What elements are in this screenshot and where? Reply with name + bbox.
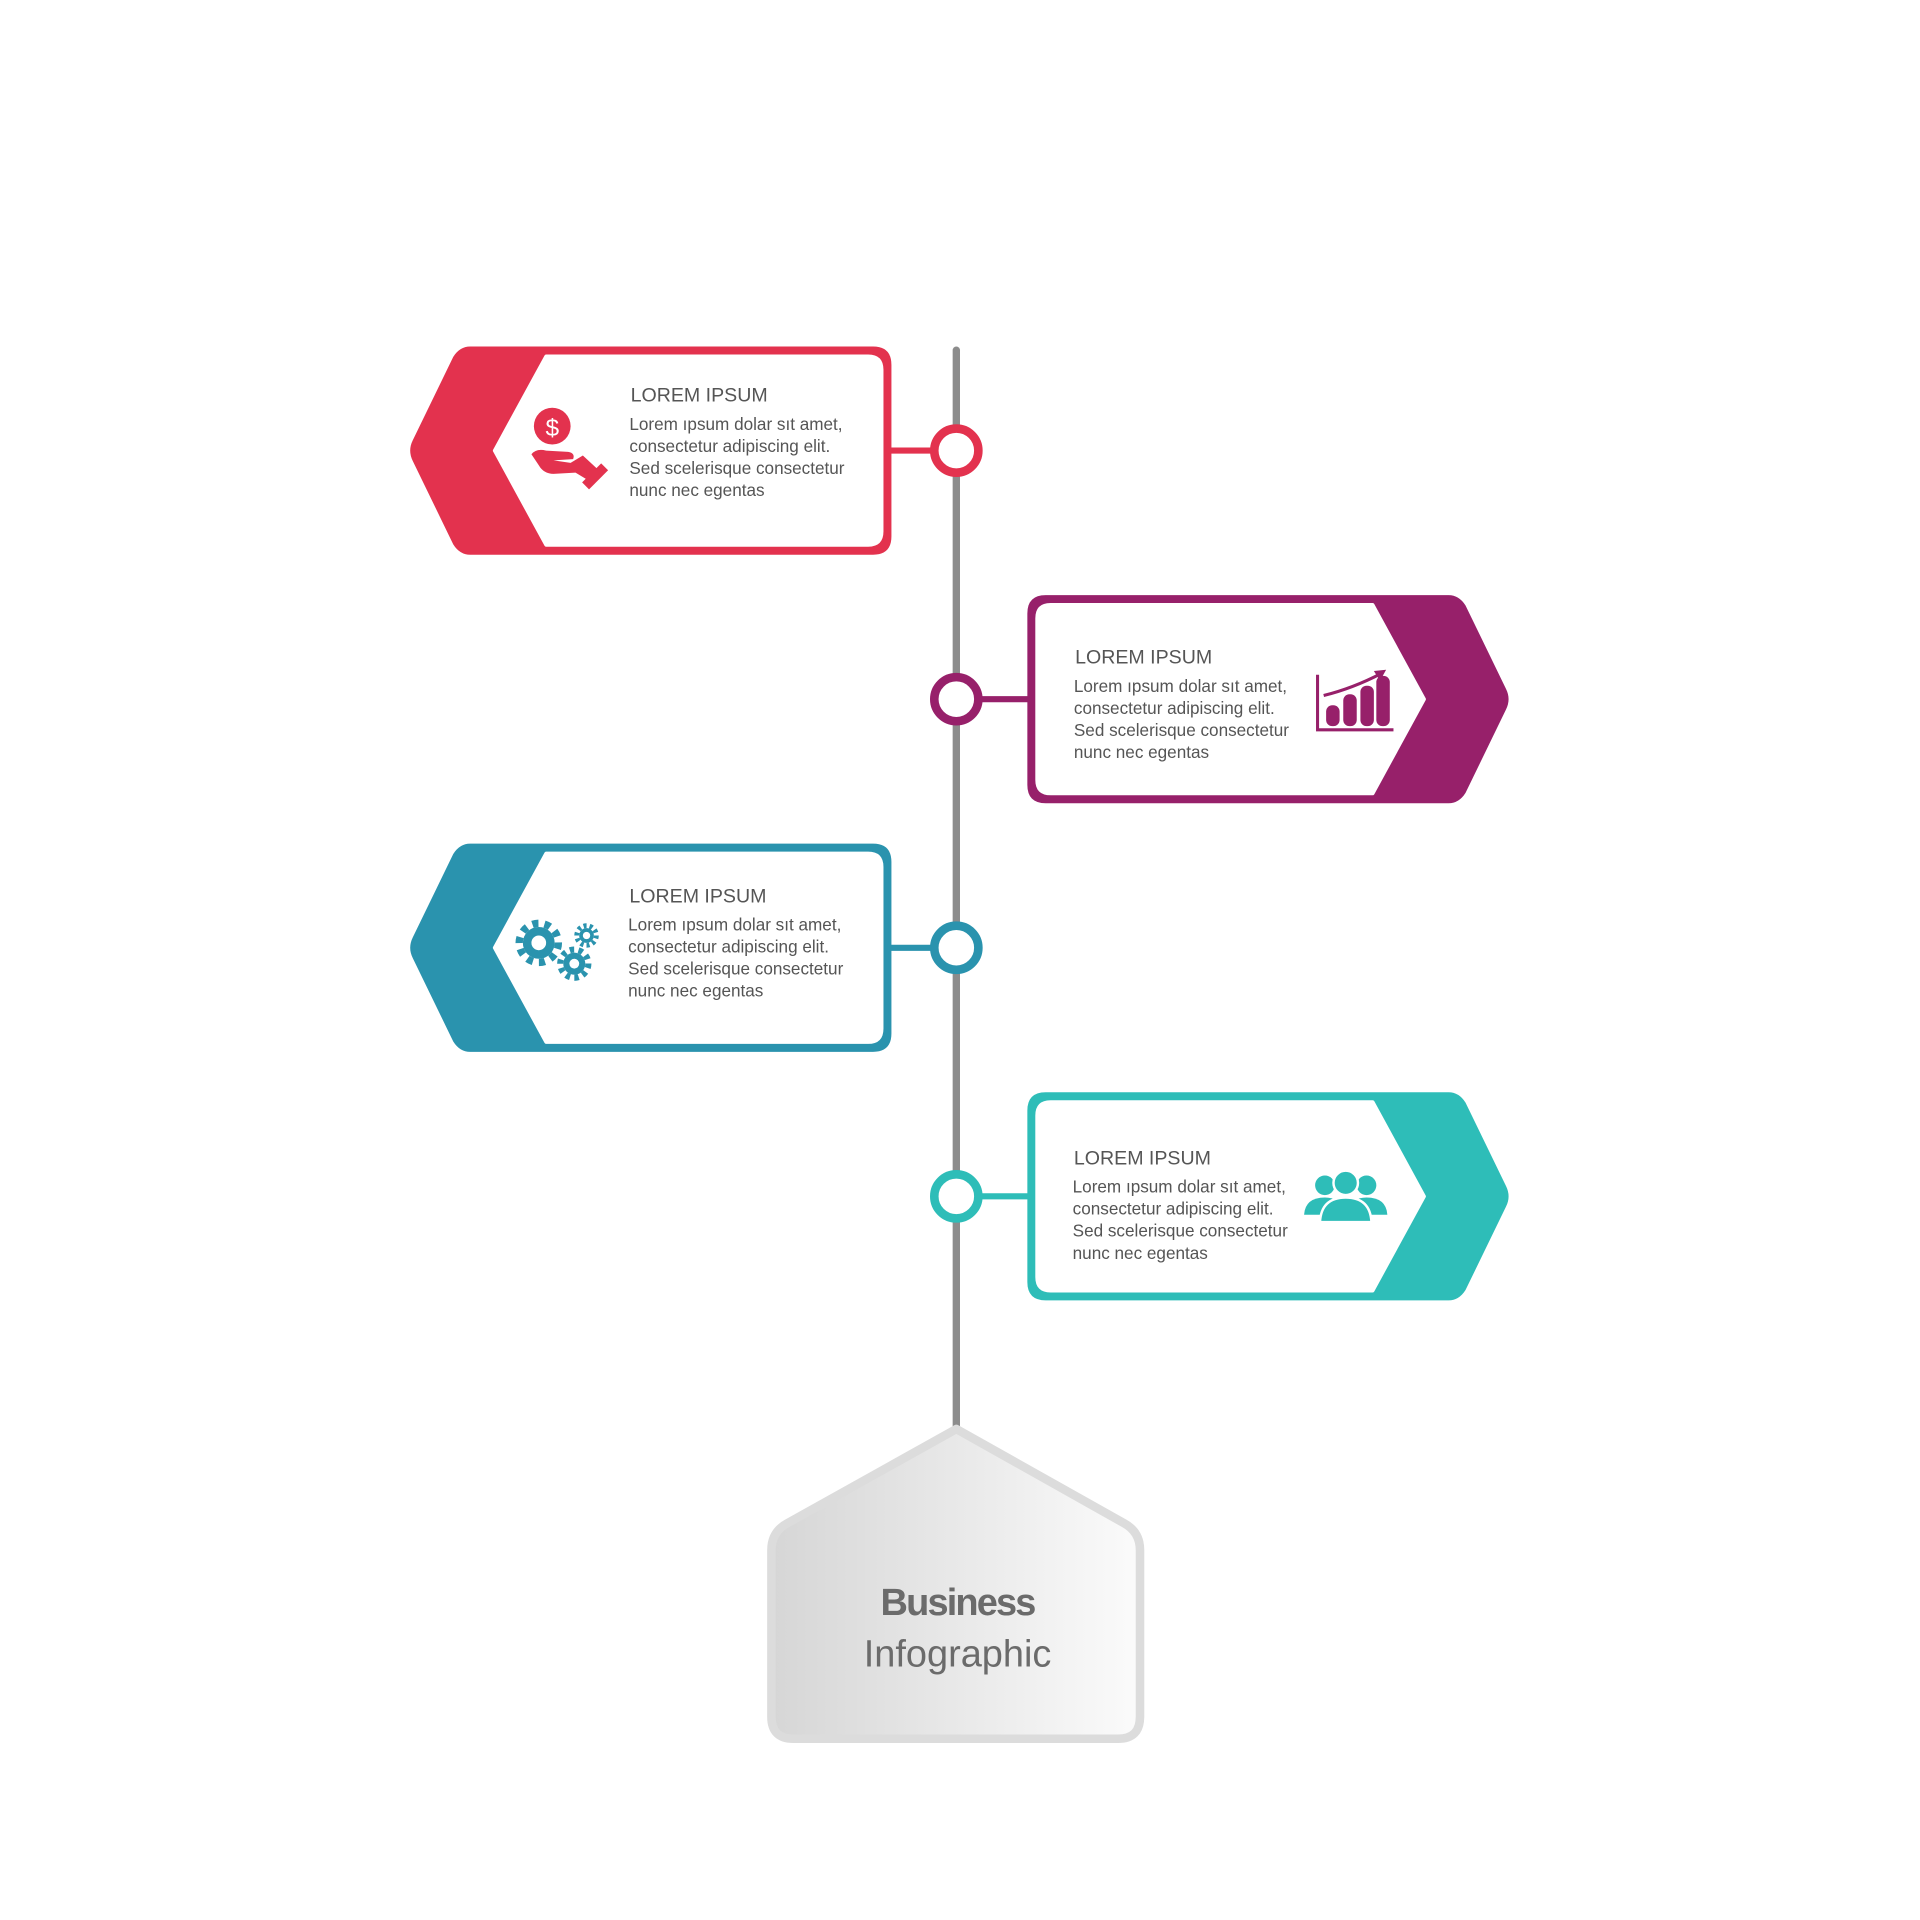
text block 1: LOREM IPSUM (631, 385, 768, 407)
text block 2: Lorem ıpsum dolar sıt amet, (1074, 676, 1287, 696)
text block 4: nunc nec egentas (1073, 1243, 1208, 1263)
text block 4: Sed scelerisque consectetur (1073, 1221, 1288, 1241)
text block 1 (629, 385, 845, 500)
text block 3: Sed scelerisque consectetur (628, 959, 844, 979)
card 4 (934, 1093, 1507, 1299)
title text (864, 1582, 1051, 1676)
text block 4: LOREM IPSUM (1074, 1147, 1211, 1169)
text block 3: nunc nec egentas (628, 981, 763, 1001)
text block 4: consectetur adipiscing elit. (1073, 1199, 1274, 1219)
icon: gears (519, 923, 596, 978)
timeline line (953, 350, 959, 1430)
card 3 (411, 845, 978, 1051)
text block 1: consectetur adipiscing elit. (629, 436, 830, 456)
title text: Infographic (864, 1634, 1051, 1676)
icon: money hand (531, 408, 608, 489)
icon: chart (1318, 670, 1393, 730)
text block 3: LOREM IPSUM (629, 885, 766, 907)
text block 2: consectetur adipiscing elit. (1074, 698, 1275, 718)
text block 3: consectetur adipiscing elit. (628, 937, 829, 957)
card 2 (934, 596, 1507, 802)
text block 3 (628, 885, 844, 1001)
text block 4 (1073, 1147, 1288, 1263)
text block 2 (1074, 647, 1289, 762)
text block 1: Sed scelerisque consectetur (629, 458, 845, 478)
icon: people (1304, 1171, 1387, 1222)
text block 2: nunc nec egentas (1074, 742, 1209, 762)
text block 3: Lorem ıpsum dolar sıt amet, (628, 915, 841, 935)
text block 4: Lorem ıpsum dolar sıt amet, (1073, 1177, 1286, 1197)
title text: Business (881, 1582, 1035, 1624)
icon: money hand: $ (545, 415, 559, 442)
text block 2: LOREM IPSUM (1075, 647, 1212, 669)
text block 1: Lorem ıpsum dolar sıt amet, (629, 414, 843, 434)
card 1 (411, 348, 978, 553)
text block 1: nunc nec egentas (629, 480, 765, 500)
text block 2: Sed scelerisque consectetur (1074, 720, 1289, 740)
title badge (771, 1429, 1140, 1739)
